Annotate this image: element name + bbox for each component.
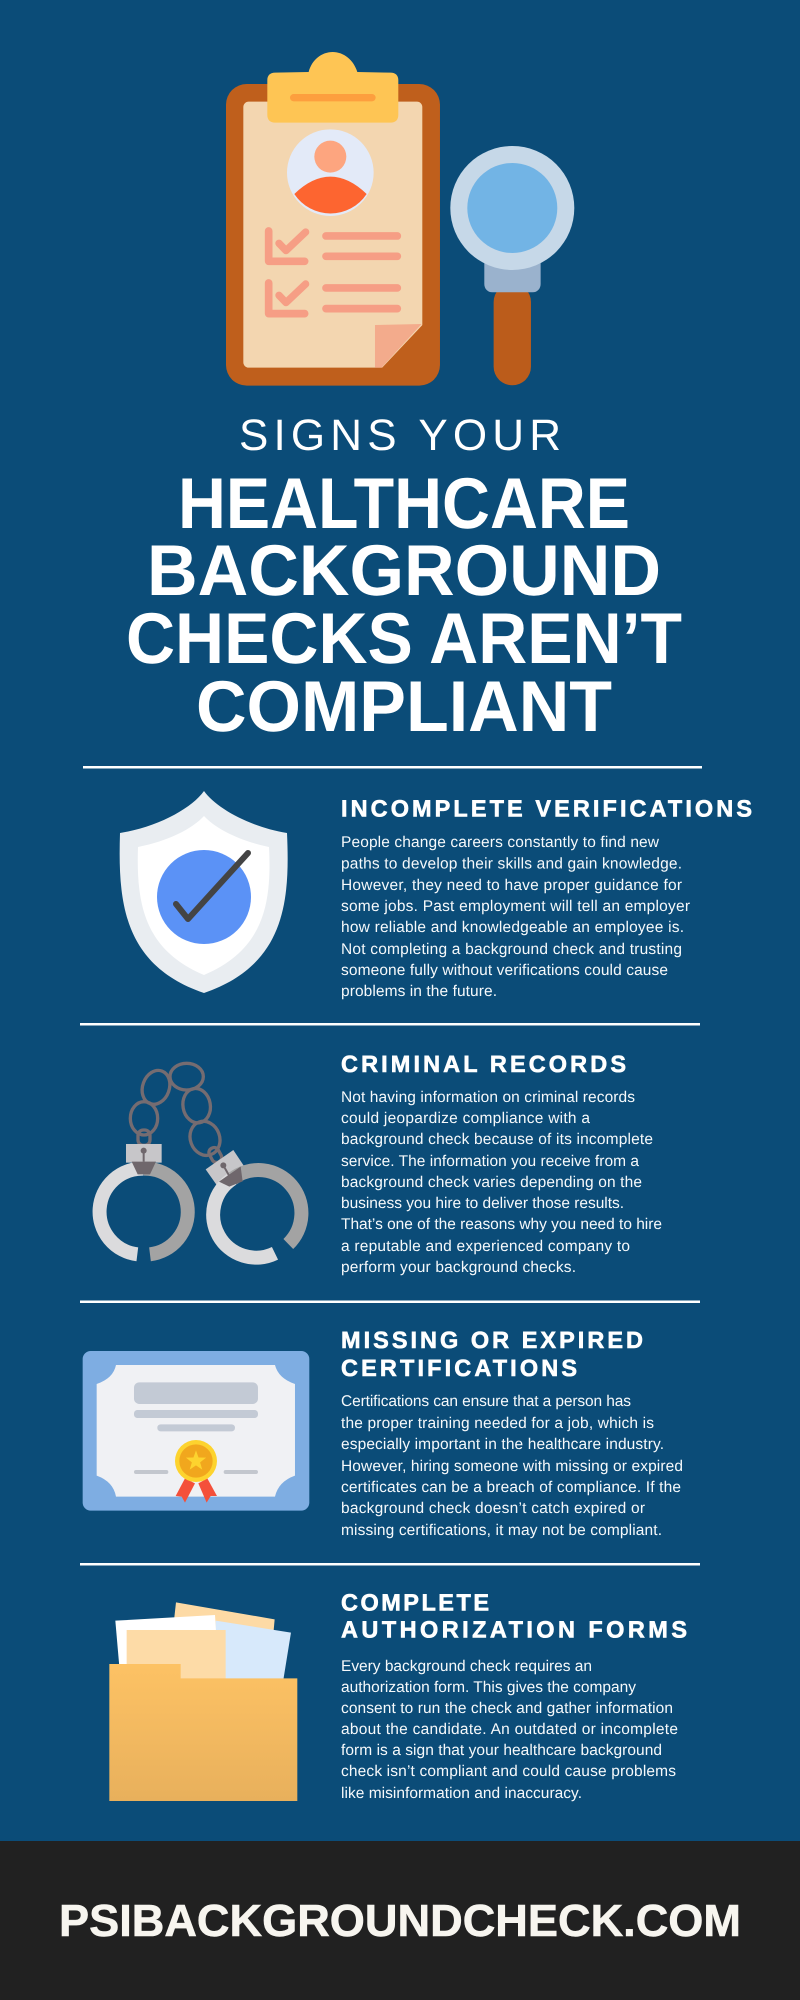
title: BACKGROUND: [147, 531, 661, 611]
body text: consent to run the check and gather information: [341, 1700, 673, 1717]
body text: background check because of its incomplete: [341, 1131, 653, 1148]
heading: CRIMINAL RECORDS: [341, 1051, 626, 1077]
body text: check isn’t compliant and could cause problems: [341, 1763, 676, 1780]
footer website address: PSIBACKGROUNDCHECK.COM: [59, 1895, 741, 1946]
title: HEALTHCARE: [178, 464, 630, 544]
footer band: [0, 1841, 800, 2000]
body text: missing certifications, it may not be compliant.: [341, 1522, 662, 1539]
body text: service. The information you receive from a: [341, 1153, 639, 1170]
heading: [341, 1590, 687, 1642]
heading: AUTHORIZATION FORMS: [341, 1616, 687, 1642]
title: CHECKS AREN’T: [126, 599, 682, 679]
body text: a reputable and experienced company to: [341, 1238, 630, 1255]
title: SIGNS YOUR: [239, 411, 561, 460]
body text: [341, 1393, 683, 1539]
panel: criminal records: [100, 1051, 662, 1276]
icon: handcuffs: [100, 1063, 301, 1258]
body text: business you hire to deliver those results.: [341, 1195, 624, 1212]
panel: missing or expired certifications: [83, 1327, 683, 1539]
body text: Certifications can ensure that a person has: [341, 1393, 631, 1410]
title: [126, 411, 682, 747]
checklist: [269, 231, 397, 314]
body text: authorization form. This gives the company: [341, 1679, 636, 1696]
body text: background check doesn’t catch expired or: [341, 1500, 645, 1517]
body text: like misinformation and inaccuracy.: [341, 1785, 582, 1802]
heading: MISSING OR EXPIRED: [341, 1327, 643, 1353]
body text: could jeopardize compliance with a: [341, 1110, 590, 1127]
icon: certificate with medal: [83, 1351, 309, 1511]
body text: perform your background checks.: [341, 1259, 576, 1276]
body text: problems in the future.: [341, 983, 497, 1000]
body text: However, they need to have proper guidance for: [341, 877, 682, 894]
body text: Not having information on criminal records: [341, 1089, 635, 1106]
heading: CERTIFICATIONS: [341, 1355, 577, 1381]
heading: [341, 1327, 643, 1381]
body text: someone fully without verifications could cause: [341, 962, 668, 979]
body text: form is a sign that your healthcare background: [341, 1742, 662, 1759]
panel: complete authorization forms: [109, 1590, 687, 1802]
body text: [341, 834, 690, 1000]
body text: about the candidate. An outdated or incomplete: [341, 1721, 678, 1738]
body text: However, hiring someone with missing or expired: [341, 1458, 683, 1475]
body text: People change careers constantly to find new: [341, 834, 660, 851]
body text: Not completing a background check and trusting: [341, 941, 682, 958]
body text: some jobs. Past employment will tell an employer: [341, 898, 690, 915]
body text: certificates can be a breach of compliance. If the: [341, 1479, 681, 1496]
page fold: [375, 323, 425, 370]
title: COMPLIANT: [196, 667, 612, 747]
body text: paths to develop their skills and gain knowledge.: [341, 856, 682, 872]
body text: how reliable and knowledgeable an employee is.: [341, 919, 684, 936]
body text: That’s one of the reasons why you need to hire: [341, 1216, 662, 1233]
body text: background check varies depending on the: [341, 1174, 642, 1191]
body text: [341, 1089, 662, 1276]
body text: especially important in the healthcare industry.: [341, 1436, 664, 1453]
avatar: [287, 129, 374, 216]
illustration: magnifying glass: [450, 146, 574, 385]
icon: folder with papers: [109, 1602, 297, 1801]
body text: [341, 1658, 678, 1802]
heading: INCOMPLETE VERIFICATIONS: [341, 796, 752, 822]
body text: the proper training needed for a job, which is: [341, 1415, 654, 1432]
illustration: clipboard with candidate profile: [226, 52, 440, 386]
icon: shield with check mark: [120, 791, 288, 993]
body text: Every background check requires an: [341, 1658, 592, 1675]
clipboard clip: [267, 52, 398, 123]
panel: incomplete verifications: [120, 791, 752, 1000]
heading: COMPLETE: [341, 1590, 489, 1616]
